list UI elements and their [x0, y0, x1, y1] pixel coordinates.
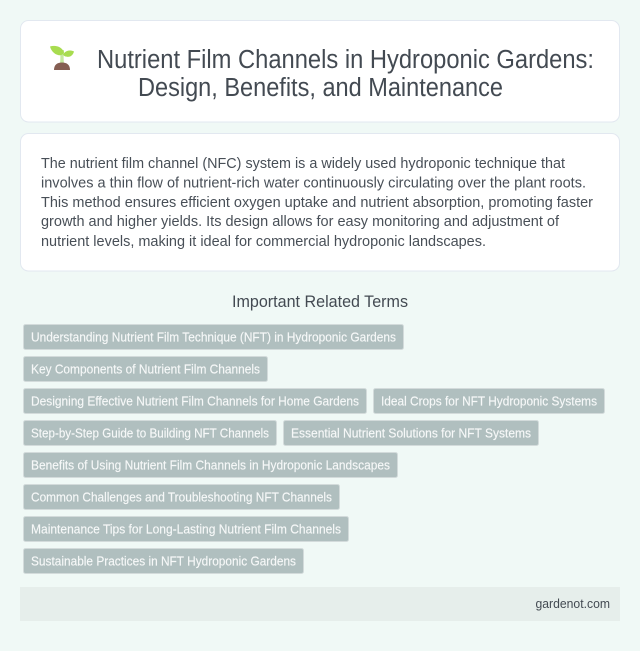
- title: [97, 46, 594, 102]
- tag: key components: [24, 356, 268, 382]
- text block: description: involves a thin flow of nutrient-rich water continuously circulating over the plant roots.: [41, 174, 586, 192]
- tag: understanding NFT: [24, 324, 404, 350]
- tag: step-by-step guide: [24, 420, 276, 446]
- tag: designing channels: [24, 388, 366, 414]
- tag: maintenance tips: [24, 516, 348, 542]
- icon: seedling: [50, 46, 74, 70]
- tag: nutrient solutions: [284, 420, 538, 446]
- tag: benefits: Benefits of Using Nutrient Film Channels in Hydroponic Landscapes: [31, 458, 390, 472]
- panel: description card: [20, 134, 620, 271]
- tag: sustainable practices: Sustainable Practices in NFT Hydroponic Gardens: [31, 554, 296, 568]
- tag: step-by-step guide: Step-by-Step Guide to Building NFT Channels: [31, 426, 269, 440]
- footer bar: [20, 587, 620, 621]
- title: Nutrient Film Channels in Hydroponic Gardens:: [97, 46, 594, 74]
- tag: maintenance tips: Maintenance Tips for Long-Lasting Nutrient Film Channels: [31, 522, 341, 536]
- text block: description: The nutrient film channel (NFC) system is a widely used hydroponic technique that: [41, 155, 566, 172]
- tag: sustainable practices: [24, 548, 304, 574]
- tag: ideal crops: [374, 388, 604, 414]
- text block: description: [41, 155, 593, 250]
- tag: understanding NFT: Understanding Nutrient Film Technique (NFT) in Hydroponic Gardens: [31, 330, 396, 344]
- tag: common challenges: [24, 484, 340, 510]
- text block: description: This method ensures efficient oxygen uptake and nutrient absorption, promoting faster: [41, 194, 593, 211]
- tag: designing channels: Designing Effective Nutrient Film Channels for Home Gardens: [31, 394, 359, 408]
- tag list: [24, 324, 604, 574]
- text block: description: nutrient levels, making it ideal for commercial hydroponic landscapes.: [41, 233, 486, 250]
- title: Design, Benefits, and Maintenance: [138, 74, 503, 102]
- tag: benefits: [24, 452, 398, 478]
- heading: important related terms: Important Related Terms: [232, 293, 408, 311]
- panel: title card: [20, 20, 620, 122]
- tag: common challenges: Common Challenges and Troubleshooting NFT Channels: [31, 490, 332, 504]
- footer credit: gardenot.com: [536, 596, 610, 611]
- text block: description: growth and higher yields. Its design allows for easy monitoring and adjustment of: [41, 213, 560, 230]
- tag: ideal crops: Ideal Crops for NFT Hydroponic Systems: [381, 394, 597, 408]
- tag: key components: Key Components of Nutrient Film Channels: [31, 362, 260, 376]
- tag: nutrient solutions: Essential Nutrient Solutions for NFT Systems: [291, 426, 531, 440]
